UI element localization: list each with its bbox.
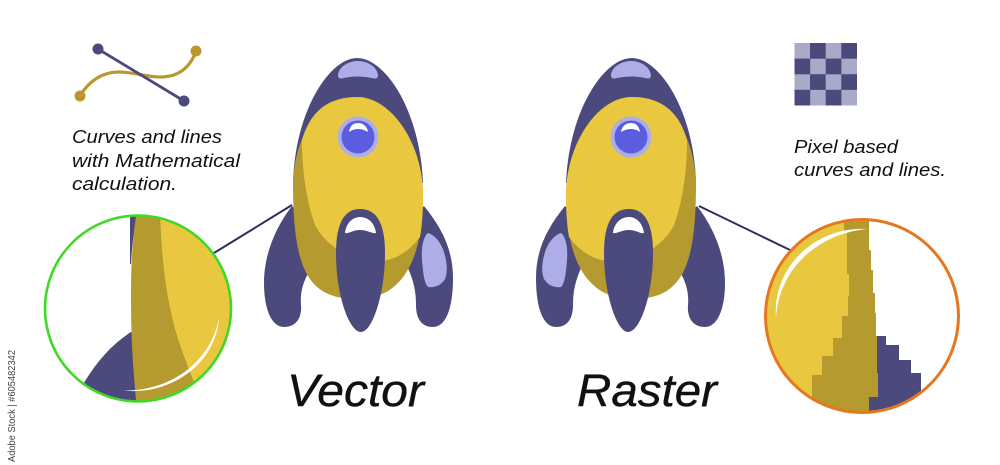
text: vector description: calculation.: [72, 174, 177, 194]
center fin: [604, 209, 653, 332]
connector line: raster: [699, 206, 790, 250]
body light: [302, 97, 423, 261]
left fin: [264, 206, 330, 327]
window: [610, 116, 652, 158]
text: vector description: [72, 127, 241, 194]
text: raster description: curves and lines.: [794, 160, 946, 180]
window: [338, 116, 378, 158]
nose cone: [293, 58, 423, 183]
rocket: vector: [264, 58, 453, 332]
heading: Vector: Vector: [287, 365, 426, 416]
icon: bezier curve with handles: [74, 44, 202, 106]
body shadow: [566, 97, 696, 299]
center fin highlight: [345, 217, 376, 233]
stock id caption: Adobe Stock | #605482342: [7, 350, 18, 462]
body light: [566, 97, 687, 261]
right fin: [390, 206, 453, 327]
text: vector description: Curves and lines: [72, 127, 222, 147]
icon: pixel checkerboard: [794, 43, 857, 106]
zoom circle: vector: [45, 210, 240, 410]
rocket: raster: [536, 58, 725, 332]
fin highlight: [542, 233, 567, 287]
heading: Raster: Raster: [577, 365, 719, 416]
center fin: [336, 209, 385, 332]
text: vector description: with Mathematical: [72, 151, 241, 171]
right fin highlight: [422, 233, 447, 287]
text: raster description: Pixel based: [794, 137, 899, 157]
zoom circle: raster: [760, 215, 958, 420]
connector line: vector: [214, 205, 292, 253]
nose highlight: [611, 61, 651, 79]
right fin: [536, 206, 599, 327]
left fin: [659, 206, 725, 327]
nose highlight: [338, 61, 378, 79]
text: raster description: [794, 137, 946, 180]
center fin highlight: [613, 217, 644, 233]
body shadow: [293, 97, 423, 299]
nose cone: [566, 58, 696, 183]
